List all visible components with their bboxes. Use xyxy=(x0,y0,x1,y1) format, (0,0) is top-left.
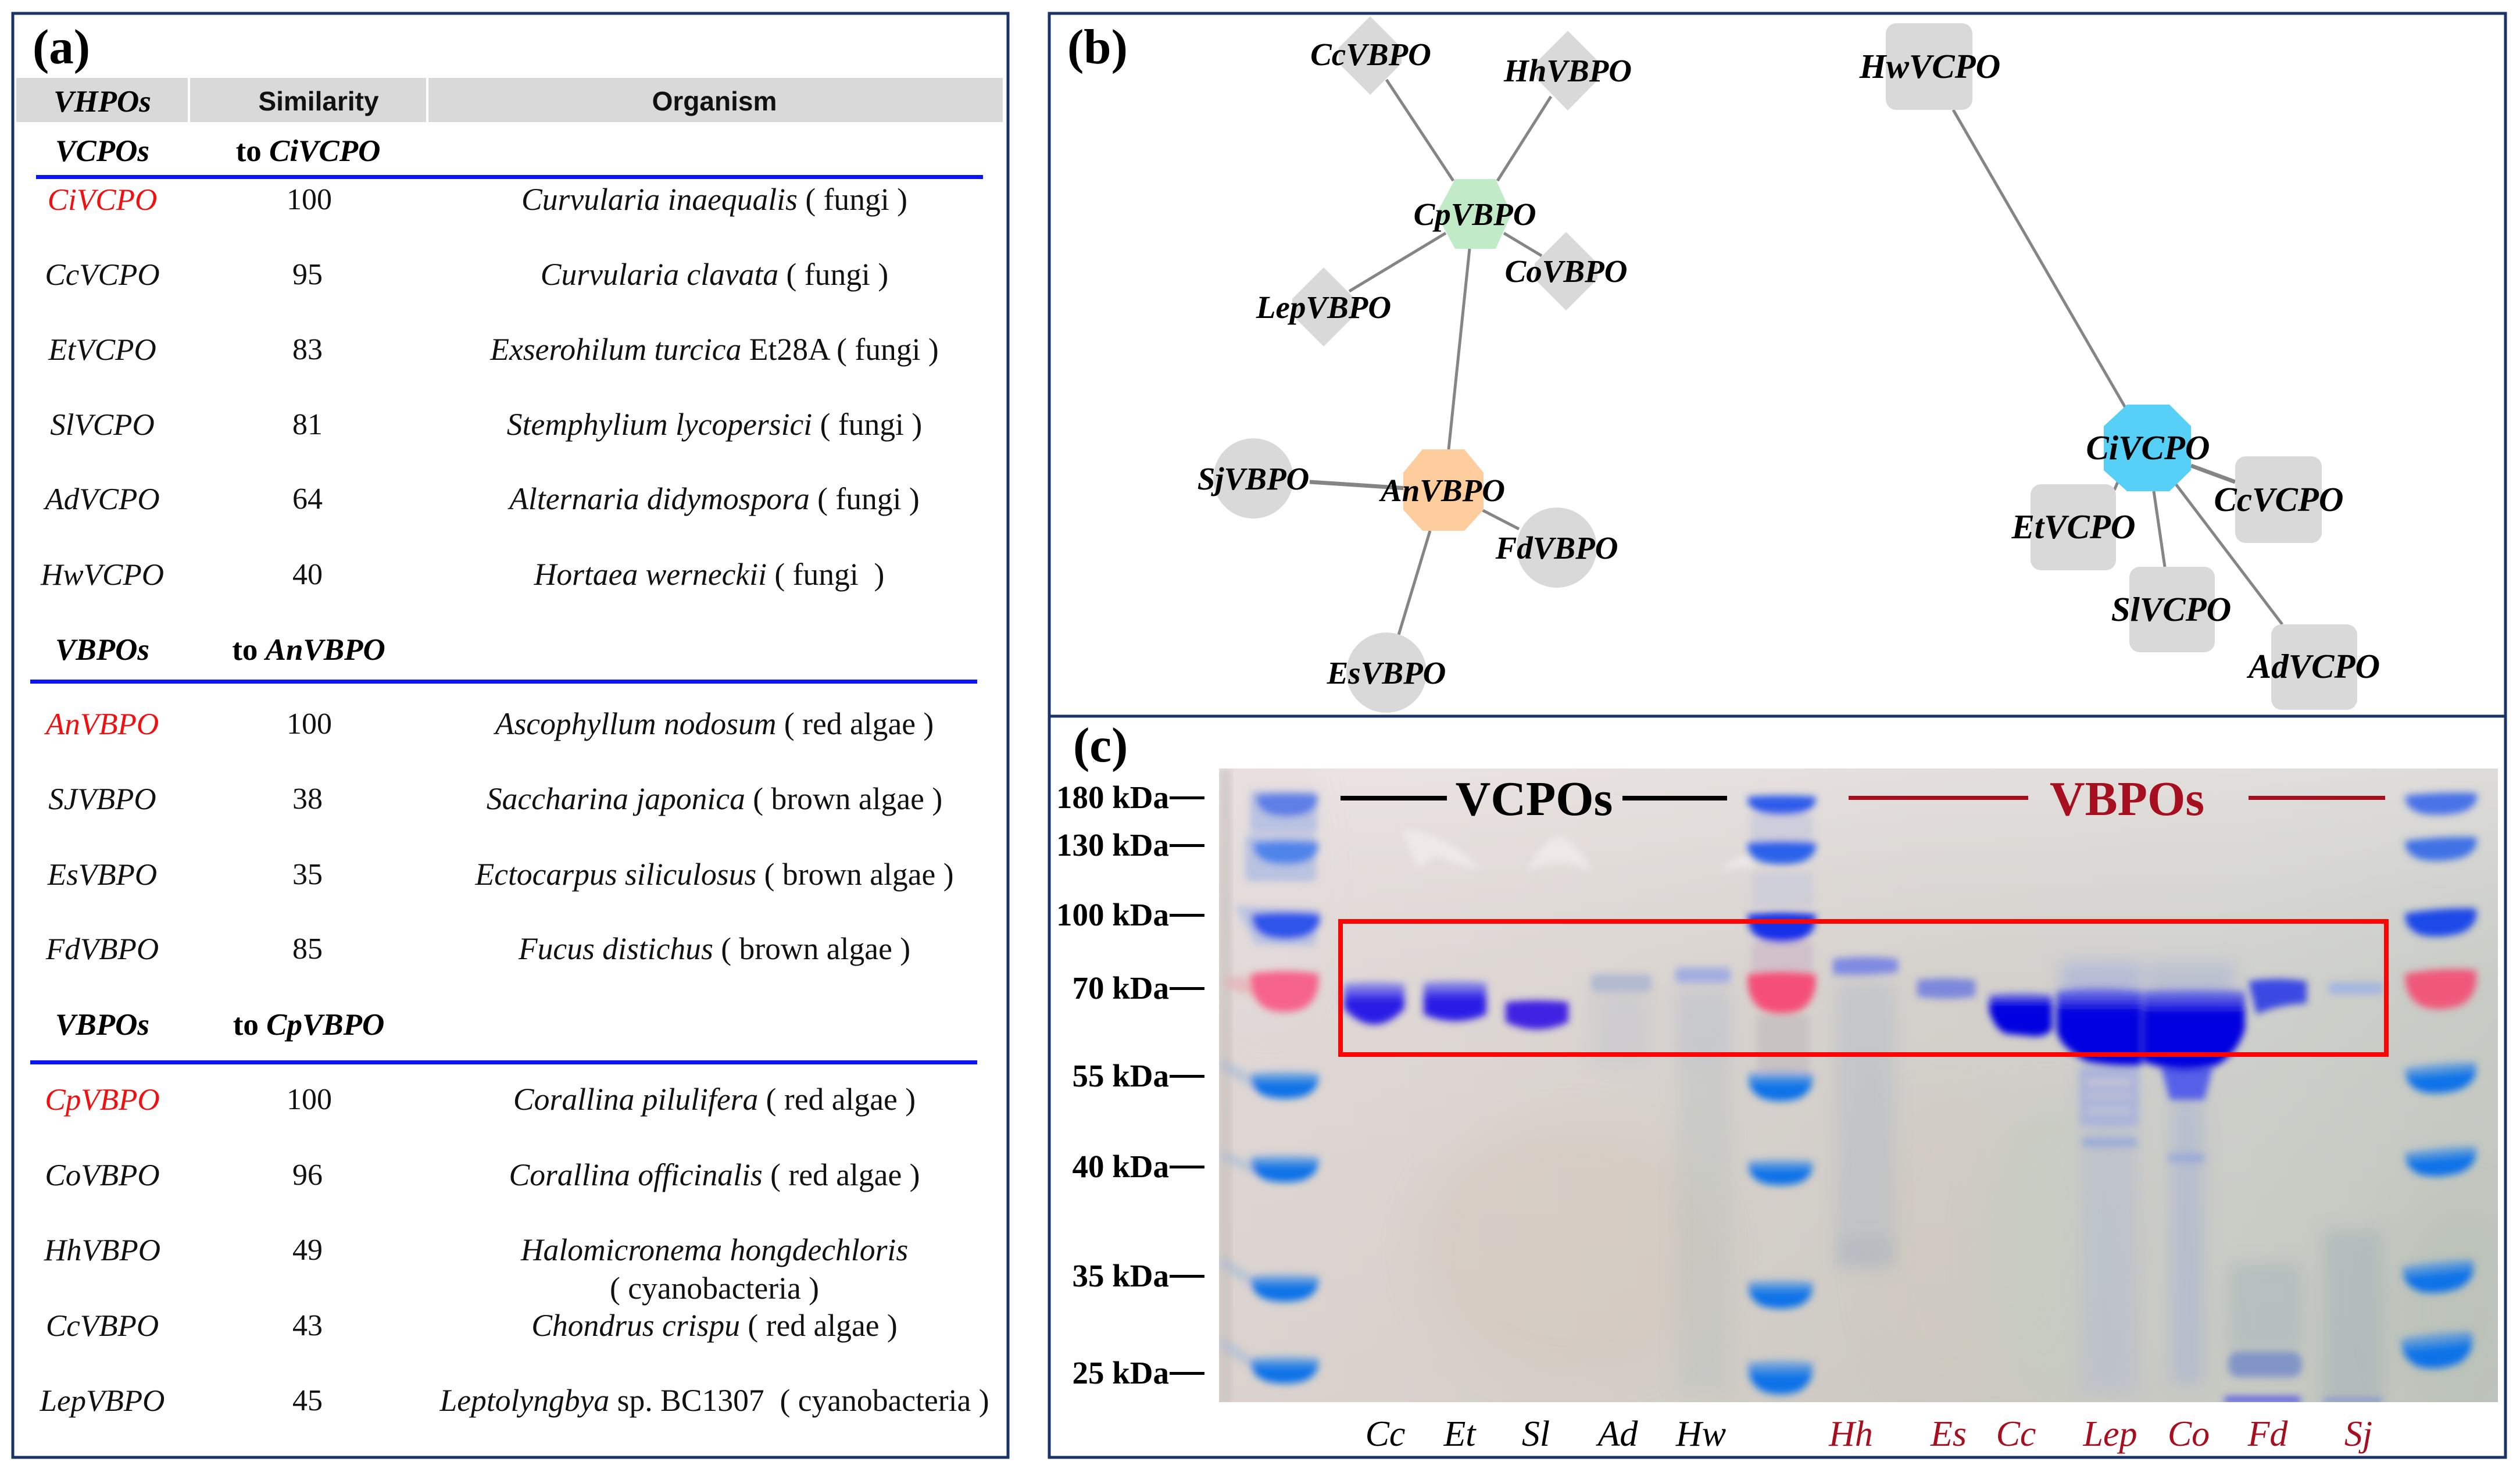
row: CcVBPO: 43 xyxy=(292,1309,323,1342)
section header: VBPOs to CpVBPO: to CpVBPO xyxy=(233,1008,384,1042)
ladder lane 3 xyxy=(2401,792,2478,1372)
row: EsVBPO xyxy=(47,857,954,892)
row: CcVBPO: CcVBPO xyxy=(46,1309,159,1343)
row: FdVBPO xyxy=(45,931,910,966)
node: SlVCPO xyxy=(2111,567,2231,652)
row: AdVCPO: Alternaria didymospora ( fungi ) xyxy=(507,481,920,516)
node: FdVBPO xyxy=(1495,507,1618,588)
node: SlVCPO: SlVCPO xyxy=(2111,590,2231,628)
node: SjVBPO xyxy=(1198,438,1309,519)
ladder lane 1 xyxy=(1221,791,1320,1384)
row: SlVCPO: Stemphylium lycopersici ( fungi ) xyxy=(507,407,922,442)
lane labels: VBPOs: Es xyxy=(1930,1414,1967,1454)
row: EtVCPO: 83 xyxy=(292,333,323,366)
panel (a): similarity table xyxy=(13,13,1008,1457)
marker labels: 25 kDa xyxy=(1072,1355,1169,1391)
lane labels: VBPOs: Hh xyxy=(1828,1414,1873,1454)
lane labels: VBPOs: Fd xyxy=(2247,1414,2288,1454)
lane labels: VCPOs: Et xyxy=(1443,1414,1477,1454)
red highlight box xyxy=(1341,921,2386,1055)
node: HwVCPO: HwVCPO xyxy=(1859,47,2000,85)
node: SjVBPO: SjVBPO xyxy=(1198,461,1309,496)
row: CcVCPO: CcVCPO xyxy=(45,258,160,292)
row: SJVBPO: SJVBPO xyxy=(48,782,156,816)
row: CoVBPO: CoVBPO xyxy=(45,1159,160,1192)
row: SJVBPO: Saccharina japonica ( brown algae ) xyxy=(487,781,942,816)
group label: VCPOs xyxy=(1341,772,1727,826)
marker labels: 70 kDa xyxy=(1072,970,1169,1006)
node: EtVCPO: EtVCPO xyxy=(2011,507,2136,546)
node: CcVBPO xyxy=(1310,16,1431,95)
row: HhVBPO xyxy=(44,1232,908,1306)
row: CcVBPO xyxy=(46,1308,898,1343)
node: CcVCPO xyxy=(2214,456,2343,543)
row: SJVBPO xyxy=(48,781,942,816)
panel label (b): (b) xyxy=(1067,20,1128,74)
row: CiVCPO: CiVCPO xyxy=(48,183,157,217)
row: HhVBPO: Halomicronema hongdechloris xyxy=(520,1232,908,1267)
lane labels: VCPOs xyxy=(1366,1414,1726,1454)
section header: VCPOs: VCPOs xyxy=(55,134,149,168)
row: FdVBPO: Fucus distichus ( brown algae ) xyxy=(518,931,910,966)
section header: VBPOs to AnVBPO xyxy=(30,633,977,684)
row: EtVCPO xyxy=(48,332,939,367)
row: FdVBPO: FdVBPO xyxy=(45,932,159,966)
row: CcVBPO: Chondrus crispu ( red algae ) xyxy=(531,1308,898,1343)
node: AdVCPO xyxy=(2246,624,2380,710)
row: SlVCPO: 81 xyxy=(292,408,323,441)
protein bands xyxy=(1344,957,2383,1070)
group label: VCPOs: VCPOs xyxy=(1456,772,1613,826)
table header: Similarity xyxy=(258,86,379,116)
lane labels: VBPOs: Sj xyxy=(2344,1414,2372,1454)
node: AnVBPO xyxy=(1379,449,1505,531)
table header: VHPOs xyxy=(53,85,151,119)
lane labels: VBPOs: Lep xyxy=(2082,1414,2137,1454)
row: EtVCPO: Exserohilum turcica Et28A ( fungi ) xyxy=(489,332,939,367)
row: HwVCPO: HwVCPO xyxy=(40,558,164,592)
row: AnVBPO: AnVBPO xyxy=(44,707,159,741)
panel label (a): (a) xyxy=(33,20,90,74)
lane labels: VBPOs xyxy=(1828,1414,2372,1454)
row: LepVBPO xyxy=(40,1383,989,1418)
row: LepVBPO: LepVBPO xyxy=(40,1384,165,1418)
row: EsVBPO: EsVBPO xyxy=(47,858,157,892)
lane labels: VCPOs: Cc xyxy=(1366,1414,1405,1454)
ladder lane 2 xyxy=(1748,795,1815,1394)
lane labels: VCPOs: Ad xyxy=(1596,1414,1638,1454)
marker labels: 100 kDa xyxy=(1056,897,1169,932)
marker labels: 55 kDa xyxy=(1072,1058,1169,1093)
row: AdVCPO xyxy=(43,481,920,516)
node: FdVBPO: FdVBPO xyxy=(1495,530,1618,566)
row: CoVBPO xyxy=(45,1157,920,1192)
lane labels: VBPOs: Co xyxy=(2168,1414,2210,1454)
marker labels: 180 kDa xyxy=(1056,780,1169,815)
row: LepVBPO: 45 xyxy=(292,1384,323,1417)
marker labels xyxy=(1056,780,1204,1391)
node: CoVBPO: CoVBPO xyxy=(1505,253,1627,289)
panel label (c): (c) xyxy=(1073,718,1128,773)
row: SlVCPO xyxy=(50,407,922,442)
node: CcVCPO: CcVCPO xyxy=(2214,480,2343,519)
row: LepVBPO: Leptolyngbya sp. BC1307 ( cyanobacteria ) xyxy=(439,1383,989,1418)
lane labels: VCPOs: Hw xyxy=(1675,1414,1726,1454)
lane labels: VBPOs: Cc xyxy=(1996,1414,2036,1454)
section header: VBPOs to AnVBPO: VBPOs xyxy=(55,633,149,667)
node: AnVBPO: AnVBPO xyxy=(1379,473,1505,508)
row: AnVBPO xyxy=(44,706,934,741)
row: CoVBPO: 96 xyxy=(292,1159,323,1192)
row: CcVCPO xyxy=(45,257,888,292)
glare highlights xyxy=(1406,832,1752,868)
node: HhVBPO: HhVBPO xyxy=(1503,53,1632,88)
row: CoVBPO: Corallina officinalis ( red algae ) xyxy=(509,1157,920,1192)
row: SJVBPO: 38 xyxy=(292,782,323,816)
row: CpVBPO: CpVBPO xyxy=(45,1083,160,1117)
row: CpVBPO xyxy=(45,1082,916,1117)
marker labels: 35 kDa xyxy=(1072,1258,1169,1293)
row: EsVBPO: Ectocarpus siliculosus ( brown algae ) xyxy=(474,857,954,892)
row: HhVBPO: ( cyanobacteria ) xyxy=(610,1271,819,1306)
marker labels: 130 kDa xyxy=(1056,827,1169,863)
row: SlVCPO: SlVCPO xyxy=(50,408,155,442)
node: LepVBPO: LepVBPO xyxy=(1256,289,1391,325)
node: CpVBPO xyxy=(1414,179,1536,249)
row: AdVCPO: AdVCPO xyxy=(43,482,160,516)
table header xyxy=(16,78,1003,122)
panel (b): similarity networks xyxy=(1049,13,2505,716)
smears xyxy=(1591,962,2382,1402)
section header: VCPOs: to CiVCPO xyxy=(236,134,380,168)
node: CoVBPO xyxy=(1505,232,1627,310)
row: AnVBPO: 100 xyxy=(287,707,332,741)
row: FdVBPO: 85 xyxy=(292,932,323,966)
row: EsVBPO: 35 xyxy=(292,858,323,891)
table header: Organism xyxy=(652,86,777,116)
section header: VBPOs to CpVBPO xyxy=(30,1008,977,1064)
row: AnVBPO: Ascophyllum nodosum ( red algae ) xyxy=(494,706,934,741)
node: CpVBPO: CpVBPO xyxy=(1414,196,1536,232)
row: HwVCPO: 40 xyxy=(292,558,323,591)
node: CiVCPO xyxy=(2086,405,2210,491)
node: EtVCPO xyxy=(2011,484,2136,570)
row: HhVBPO: 49 xyxy=(292,1234,323,1267)
node: CiVCPO: CiVCPO xyxy=(2086,428,2210,467)
node: HhVBPO xyxy=(1503,31,1632,110)
row: CcVCPO: Curvularia clavata ( fungi ) xyxy=(541,257,888,292)
row: HhVBPO: HhVBPO xyxy=(44,1234,160,1267)
panel (c): SDS-PAGE gel xyxy=(1049,716,2520,1457)
row: CiVCPO: 100 xyxy=(287,183,332,216)
row: CpVBPO: 100 xyxy=(287,1083,332,1116)
node: HwVCPO xyxy=(1859,23,2000,110)
row: AdVCPO: 64 xyxy=(292,482,323,516)
node: CcVBPO: CcVBPO xyxy=(1310,37,1431,72)
row: CiVCPO: Curvularia inaequalis ( fungi ) xyxy=(521,182,907,217)
section header: VBPOs to AnVBPO: to AnVBPO xyxy=(232,633,385,667)
node: AdVCPO: AdVCPO xyxy=(2246,647,2380,685)
row: HwVCPO: Hortaea werneckii ( fungi ) xyxy=(534,557,884,592)
node: EsVBPO: EsVBPO xyxy=(1327,655,1446,691)
row: CiVCPO xyxy=(48,182,907,217)
section header: VBPOs to CpVBPO: VBPOs xyxy=(55,1008,149,1042)
row: CcVCPO: 95 xyxy=(292,258,323,291)
lane labels: VCPOs: Sl xyxy=(1522,1414,1550,1454)
row: HwVCPO xyxy=(40,557,884,592)
group label: VBPOs xyxy=(1849,772,2385,826)
row: EtVCPO: EtVCPO xyxy=(48,333,156,367)
marker labels: 40 kDa xyxy=(1072,1149,1169,1184)
group label: VBPOs: VBPOs xyxy=(2050,772,2204,826)
gel photograph xyxy=(1219,769,2498,1402)
row: CpVBPO: Corallina pilulifera ( red algae ) xyxy=(513,1082,916,1117)
network edges xyxy=(1310,80,2282,635)
node: EsVBPO xyxy=(1327,632,1446,713)
node: LepVBPO xyxy=(1256,267,1391,346)
section header: VCPOs xyxy=(36,134,983,179)
